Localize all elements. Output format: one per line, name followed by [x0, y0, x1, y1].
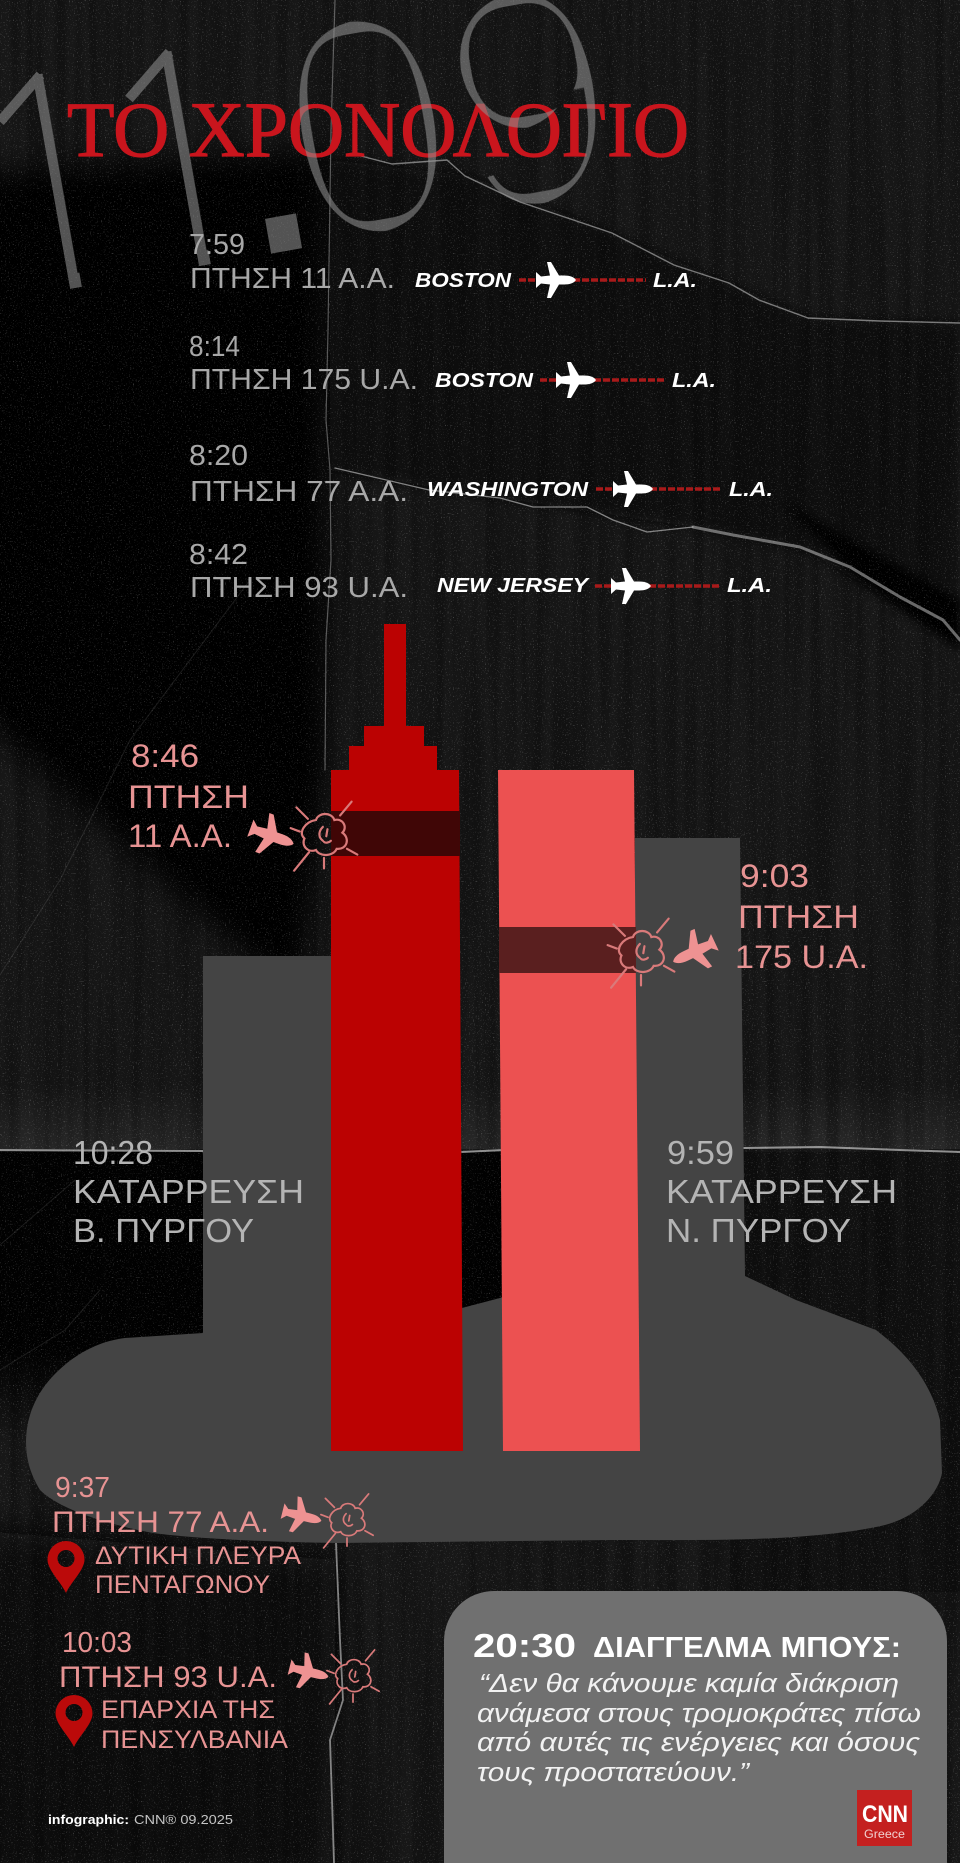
quote text: τους προστατεύουν.”: [477, 1757, 751, 1787]
timeline: flight 175 UA departure: BOSTON: [435, 370, 534, 392]
timeline: flight 77 AA departure: WASHINGTON: [427, 479, 589, 501]
timeline: flight 175 UA departure: 8:14: [189, 331, 240, 363]
label: 9:37 flight 77 AA Pentagon: ΠΤΗΣΗ 77 Α.Α.: [52, 1506, 269, 1539]
label: north tower collapse 10:28: 10:28: [73, 1134, 153, 1171]
background date numerals 11.09: [0, 0, 596, 289]
timeline: flight 77 AA departure: ΠΤΗΣΗ 77 Α.Α.: [190, 476, 408, 508]
timeline: flight 175 UA departure: [189, 331, 716, 398]
timeline: flight 11 AA departure: 7:59: [189, 229, 245, 261]
timeline: flight 175 UA departure: ΠΤΗΣΗ 175 U.A.: [190, 364, 418, 396]
south tower: [498, 770, 640, 1451]
label: north tower collapse 10:28: Β. ΠΥΡΓΟΥ: [73, 1212, 254, 1249]
label: 10:03 flight 93 UA Pennsylvania: 10:03: [62, 1627, 132, 1659]
panel heading: [473, 1627, 901, 1664]
timeline: flight 11 AA departure: L.A.: [653, 270, 697, 292]
label: 9:37 flight 77 AA Pentagon: ΠΕΝΤΑΓΩΝΟΥ: [95, 1571, 270, 1599]
credit line: [48, 1812, 233, 1827]
credit line: infographic:: [48, 1812, 129, 1827]
panel heading: 20:30: [473, 1627, 576, 1664]
label: 9:37 flight 77 AA Pentagon: 9:37: [55, 1472, 110, 1504]
quote text: [477, 1668, 921, 1787]
timeline: flight 93 UA departure: ΠΤΗΣΗ 93 U.A.: [190, 572, 408, 604]
logo: CNN Greece: CNN: [862, 1801, 908, 1828]
impact band: north tower: [331, 811, 460, 856]
timeline: flight 11 AA departure: BOSTON: [415, 270, 512, 292]
timeline: flight 93 UA departure: NEW JERSEY: [437, 575, 590, 597]
label: 10:03 flight 93 UA Pennsylvania: ΕΠΑΡΧΙΑ ΤΗΣ: [101, 1696, 275, 1724]
timeline: flight 175 UA departure: L.A.: [672, 370, 716, 392]
credit line: CNN® 09.2025: [134, 1812, 233, 1827]
label: south tower collapse 9:59: [666, 1134, 897, 1249]
label: 10:03 flight 93 UA Pennsylvania: ΠΤΗΣΗ 93 U.A.: [59, 1661, 277, 1694]
logo: CNN Greece: Greece: [864, 1827, 905, 1841]
quote text: από αυτές τις ενέργειες και όσους: [477, 1727, 920, 1757]
quote text: “Δεν θα κάνουμε καμία διάκριση: [479, 1668, 899, 1698]
timeline: flight 77 AA departure: 8:20: [189, 440, 248, 472]
label: 8:46 flight 11 AA impact: ΠΤΗΣΗ: [128, 779, 249, 815]
timeline: flight 11 AA departure: ΠΤΗΣΗ 11 Α.Α.: [190, 263, 395, 295]
label: 9:03 flight 175 UA impact: [608, 858, 868, 988]
timeline: flight 77 AA departure: L.A.: [729, 479, 773, 501]
label: 9:03 flight 175 UA impact: ΠΤΗΣΗ: [738, 899, 859, 935]
panel: Bush address quote: [444, 1591, 947, 1863]
label: north tower collapse 10:28: ΚΑΤΑΡΡΕΥΣΗ: [73, 1173, 304, 1210]
label: south tower collapse 9:59: ΚΑΤΑΡΡΕΥΣΗ: [666, 1173, 897, 1210]
label: 9:03 flight 175 UA impact: 9:03: [740, 858, 809, 894]
label: 10:03 flight 93 UA Pennsylvania: [56, 1627, 379, 1754]
timeline: flight 11 AA departure: [189, 229, 697, 298]
grey skyline and debris mound: [26, 838, 942, 1543]
timeline: flight 93 UA departure: 8:42: [189, 539, 248, 571]
timeline: flight 93 UA departure: [189, 539, 772, 604]
label: 9:37 flight 77 AA Pentagon: [48, 1472, 373, 1599]
title: ΤΟ ΧΡΟΝΟΛΟΓΙΟ: [67, 86, 689, 173]
timeline: flight 77 AA departure: [189, 440, 773, 508]
label: 8:46 flight 11 AA impact: 8:46: [131, 738, 199, 774]
panel heading: ΔΙΑΓΓΕΛΜΑ ΜΠΟΥΣ:: [593, 1632, 901, 1664]
timeline: flight 93 UA departure: L.A.: [727, 575, 772, 597]
label: 8:46 flight 11 AA impact: 11 Α.Α.: [128, 818, 232, 854]
label: 9:03 flight 175 UA impact: 175 U.A.: [735, 939, 868, 975]
impact band: south tower: [499, 927, 636, 973]
label: 9:37 flight 77 AA Pentagon: ΔΥΤΙΚΗ ΠΛΕΥΡΑ: [95, 1542, 301, 1570]
label: 10:03 flight 93 UA Pennsylvania: ΠΕΝΣΥΛΒΑΝΙΑ: [101, 1726, 288, 1754]
label: 8:46 flight 11 AA impact: [128, 738, 357, 871]
north tower: [331, 624, 463, 1451]
label: north tower collapse 10:28: [73, 1134, 304, 1249]
label: south tower collapse 9:59: 9:59: [667, 1134, 734, 1171]
quote text: ανάμεσα στους τρομοκράτες πίσω: [477, 1698, 921, 1728]
label: south tower collapse 9:59: Ν. ΠΥΡΓΟΥ: [666, 1212, 851, 1249]
logo: CNN Greece: [857, 1790, 912, 1846]
